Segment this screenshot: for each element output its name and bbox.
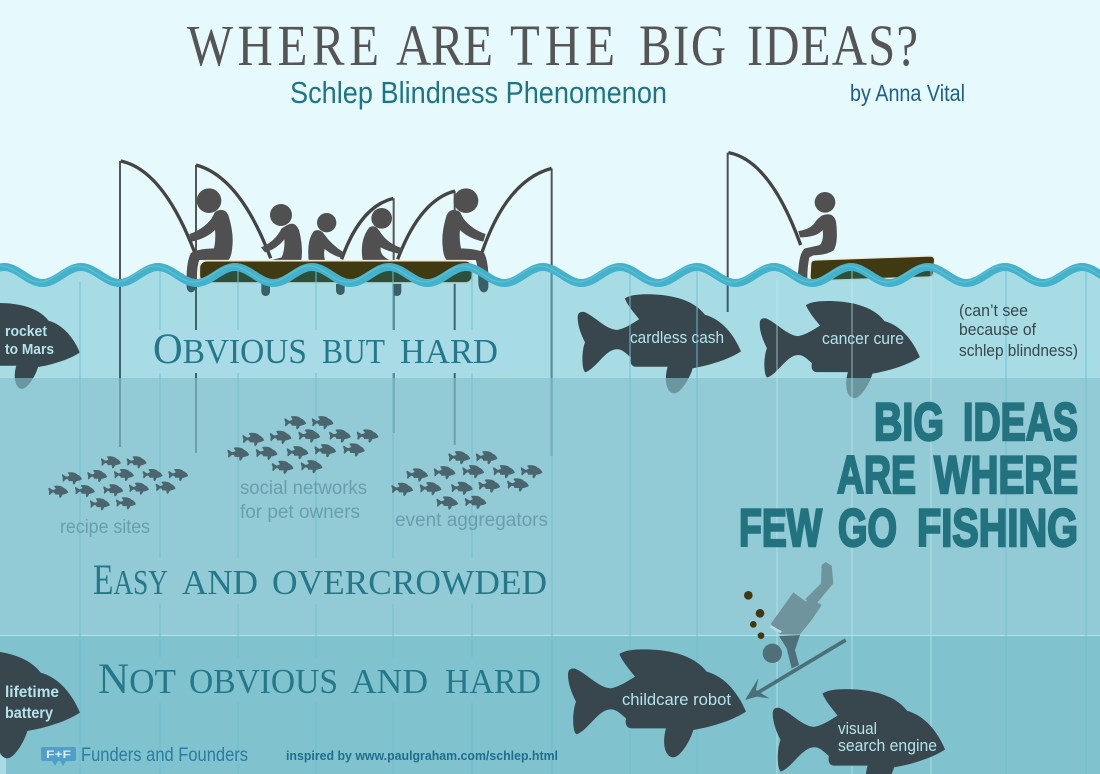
heading: obvious but hard: BUT (322, 332, 385, 371)
label: recipe sites: recipe sites (60, 517, 150, 538)
middle water band (0, 378, 1100, 635)
fishing lines (120, 161, 552, 456)
fish: cancer cure (760, 301, 920, 398)
water surface fill (0, 267, 1100, 774)
heading: obvious but hard: HARD (400, 332, 498, 371)
title: ARE (396, 13, 493, 78)
heading: not obvious and hard: HARD (445, 662, 541, 701)
big statement: FEW (739, 499, 822, 558)
diver torso and head (763, 635, 800, 668)
title: THE (510, 13, 615, 78)
fish: visual search engine (773, 689, 945, 774)
wave line (0, 266, 1100, 283)
big statement: GO (838, 499, 897, 558)
heading: obvious but hard: OBVIOUS (153, 326, 307, 373)
title (187, 13, 918, 78)
fish: lifetime battery (0, 650, 80, 758)
note: cannot see: because of (959, 321, 1036, 339)
logo: F+F (41, 747, 76, 766)
title: WHERE (187, 13, 379, 78)
fish: cardless cash: cardless cash (630, 329, 724, 347)
fish: cardless cash (578, 294, 741, 393)
fish: visual search engine: visual (838, 719, 877, 738)
fishing line and rod (725, 153, 731, 312)
school of fish: recipe sites (48, 456, 188, 510)
group of fishers in boat (120, 161, 552, 456)
label: social networks for pet owners (240, 478, 367, 523)
fish: rocket to Mars: rocket (5, 324, 47, 340)
note: cannot see: (can’t see (959, 302, 1028, 320)
label: event aggregators: event aggregators (395, 510, 548, 531)
heading: obvious but hard (153, 326, 498, 373)
subtitle: Schlep Blindness Phenomenon (290, 75, 667, 110)
heading: easy and overcrowded: OVERCROWDED (272, 563, 547, 602)
fisher figure (798, 192, 837, 283)
bottom water band (0, 635, 1100, 774)
heading: not obvious and hard: NOT (98, 656, 176, 703)
title: IDEAS? (747, 13, 918, 78)
school of fish: social networks (227, 416, 379, 474)
heading: not obvious and hard: AND (351, 662, 428, 701)
diver legs and tank (771, 562, 833, 634)
fish: childcare robot: childcare robot (622, 690, 731, 709)
feet (266, 277, 397, 292)
fish: visual search engine: search engine (838, 736, 937, 755)
fish: childcare robot (568, 649, 746, 757)
label: social networks for pet owners: social networks (240, 478, 367, 499)
heading background gaps (90, 330, 548, 702)
fish: rocket to Mars: to Mars (5, 342, 54, 358)
note: cannot see (959, 302, 1078, 360)
bubbles (744, 591, 764, 639)
title: BIG (639, 13, 726, 78)
boat (199, 261, 473, 283)
diver (744, 562, 846, 700)
note: cannot see: schlep blindness) (959, 342, 1078, 360)
fish: lifetime battery: lifetime (5, 684, 59, 701)
heading: not obvious and hard (98, 656, 541, 703)
big statement: ARE (837, 446, 916, 505)
fish: lifetime battery: battery (5, 705, 53, 722)
log (810, 256, 935, 281)
arrow to fish (745, 640, 846, 700)
heading: easy and overcrowded: EASY (93, 557, 168, 604)
school of fish: event aggregators (391, 451, 543, 510)
big statement: BIG (874, 393, 944, 452)
byline: by Anna Vital (850, 80, 965, 106)
label: social networks for pet owners: for pet owners (240, 502, 360, 523)
heading: easy and overcrowded (93, 557, 547, 604)
fishers (187, 188, 488, 292)
fish: cancer cure: cancer cure (822, 330, 904, 348)
heading: not obvious and hard: OBVIOUS (189, 662, 338, 701)
lone fisher on log (728, 153, 935, 312)
fishing rods (121, 161, 552, 259)
footer brand: Funders and Founders (81, 745, 248, 766)
footer credit: inspired by www.paulgraham.com/schlep.html (286, 749, 558, 763)
big statement (739, 393, 1078, 558)
heading: easy and overcrowded: AND (182, 563, 258, 602)
fish: rocket to Mars (0, 303, 80, 389)
logo: F+F: F+F (46, 749, 71, 761)
